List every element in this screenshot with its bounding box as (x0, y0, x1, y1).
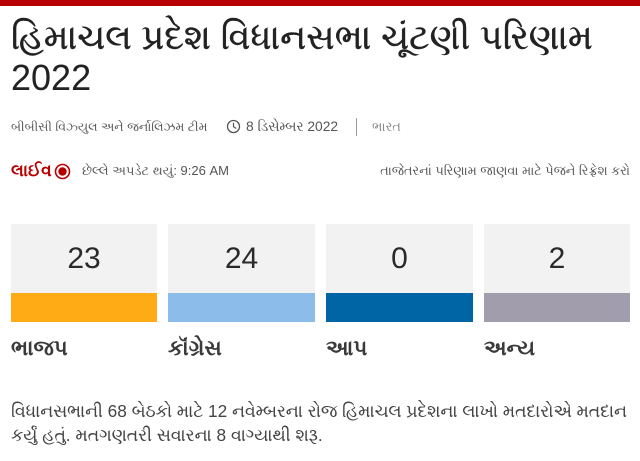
refresh note: તાજેતરનાં પરિણામ જાણવા માટે પેજને રિફ્રેશ કરો (380, 163, 630, 178)
AAP colour bar (326, 293, 473, 322)
Congress colour bar (168, 293, 315, 322)
last updated: છેલ્લે અપડેટ થયું: 9:26 AM (82, 163, 229, 178)
AAP seats (326, 224, 473, 293)
BJP label: ભાજપ (11, 336, 68, 360)
BJP colour bar (11, 293, 157, 322)
panel: Others (484, 224, 630, 360)
Congress seats: 24 (225, 242, 258, 275)
panel: Congress (168, 224, 315, 360)
Others label: અન્ય (484, 336, 535, 360)
top red band (0, 0, 640, 6)
icon: live indicator (54, 164, 70, 180)
title: હિમાચલ પ્રદેશ વિધાનસભા ચૂંટણી પરિણામ 2022 (11, 18, 593, 98)
AAP label: આપ (326, 336, 367, 360)
section label: ભારત (372, 119, 401, 134)
Others colour bar (484, 293, 630, 322)
date: 8 ડિસેમ્બર 2022 (246, 119, 338, 134)
summary paragraph: વિધાનસભાની 68 બેઠકો માટે 12 નવેમ્બરના રોજ હિમાચલ પ્રદેશના લાખો મતદારોએ મતદાન કર્યું હતું. મતગણતરી સવારના 8 વાગ્યાથી શરૂ. (11, 401, 627, 445)
icon: clock (226, 120, 240, 134)
Others seats (484, 224, 630, 293)
panel: BJP (11, 224, 157, 360)
byline: બીબીસી વિઝ્યુલ અને જર્નાલિઝમ ટીમ (11, 120, 207, 134)
AAP seats: 0 (391, 242, 408, 275)
BJP seats: 23 (67, 242, 101, 275)
live label: લાઈવ (11, 161, 52, 180)
meta divider (356, 118, 357, 136)
BJP seats (11, 224, 157, 293)
Others seats: 2 (549, 242, 565, 275)
Congress seats (168, 224, 315, 293)
panel: AAP (326, 224, 473, 360)
Congress label: કૉંગ્રેસ (168, 336, 222, 360)
